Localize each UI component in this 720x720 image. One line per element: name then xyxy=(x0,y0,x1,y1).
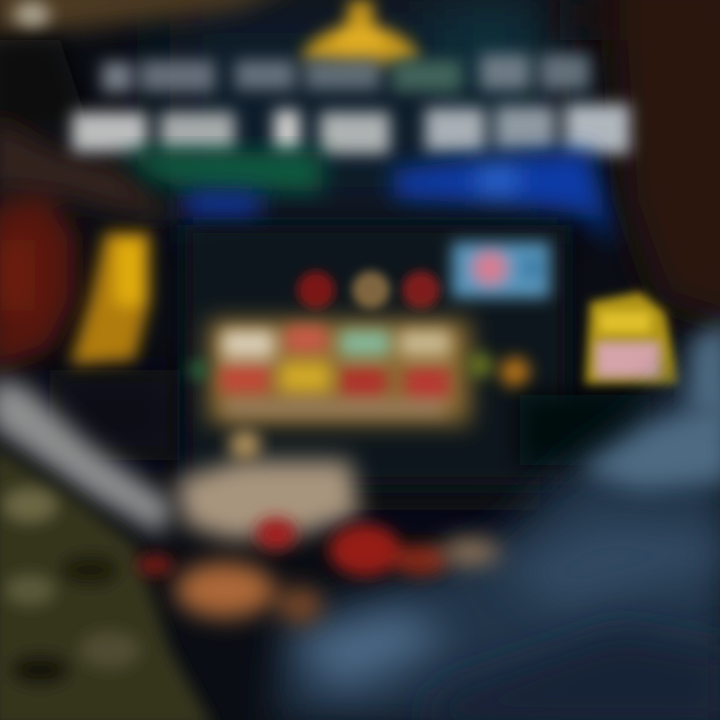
green and orange side lights xyxy=(190,353,530,387)
red poker chips xyxy=(137,518,448,576)
blue hoodie xyxy=(275,320,720,720)
hat highlight xyxy=(14,1,50,29)
blue banners xyxy=(185,150,615,250)
yellow left panel xyxy=(70,232,150,365)
slot machine reels xyxy=(208,320,470,424)
card glow xyxy=(229,429,261,461)
hat at top left xyxy=(0,0,300,40)
background: dark upper wall xyxy=(170,0,570,510)
green banner xyxy=(125,152,322,192)
left person: head and hat brim xyxy=(0,40,180,370)
hands xyxy=(175,540,500,623)
camouflage jacket xyxy=(0,445,215,720)
blue bonus box xyxy=(452,242,550,298)
right yellow card xyxy=(585,292,680,385)
grey sleeve xyxy=(0,378,175,535)
top slot symbols xyxy=(297,271,440,309)
headline row 2 xyxy=(72,104,630,154)
tablet screen frame xyxy=(185,225,565,485)
playing cards xyxy=(175,460,360,540)
headline row 1 xyxy=(102,54,590,92)
right dark hoodie shoulder shadow xyxy=(520,395,650,465)
top right dark red figure xyxy=(560,0,720,330)
left dark area below face xyxy=(50,370,180,460)
lamp at top xyxy=(300,0,420,65)
headline text blocks (illegible in reference) xyxy=(72,54,630,154)
